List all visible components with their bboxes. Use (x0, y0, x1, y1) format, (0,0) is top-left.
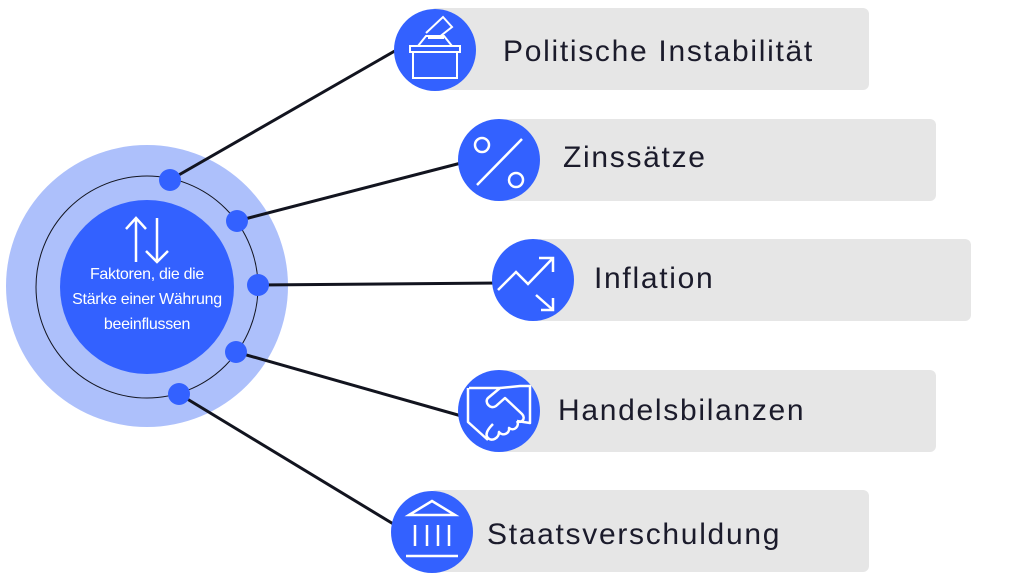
connector lines (170, 48, 500, 525)
center text: Stärke einer Währung (72, 291, 222, 308)
panel: Handelsbilanzen: Handelsbilanzen (558, 394, 805, 427)
panel: Staatsverschuldung (430, 490, 869, 572)
center text: Faktoren, die die (90, 266, 204, 283)
panel: Staatsverschuldung: Staatsverschuldung (487, 518, 781, 551)
icon: government building (391, 491, 473, 573)
connector dots (159, 169, 269, 405)
icon: up down arrows (126, 218, 168, 262)
panel: Inflation: Inflation (594, 262, 714, 295)
icon: handshake (458, 370, 540, 452)
icon: percent (458, 119, 540, 201)
icon: ballot box (394, 9, 476, 91)
center text: beeinflussen (104, 316, 190, 333)
panel: Handelsbilanzen (500, 370, 936, 452)
icon: inflation arrows (492, 239, 574, 321)
panel: Politische Instabilität (430, 8, 869, 90)
panel: Politische Instabilität: Politische Instabilität (503, 35, 814, 68)
panel: Inflation (535, 239, 971, 321)
panel: Zinssätze: Zinssätze (563, 141, 707, 174)
central circle (6, 145, 288, 427)
panel: Zinssätze (500, 119, 936, 201)
